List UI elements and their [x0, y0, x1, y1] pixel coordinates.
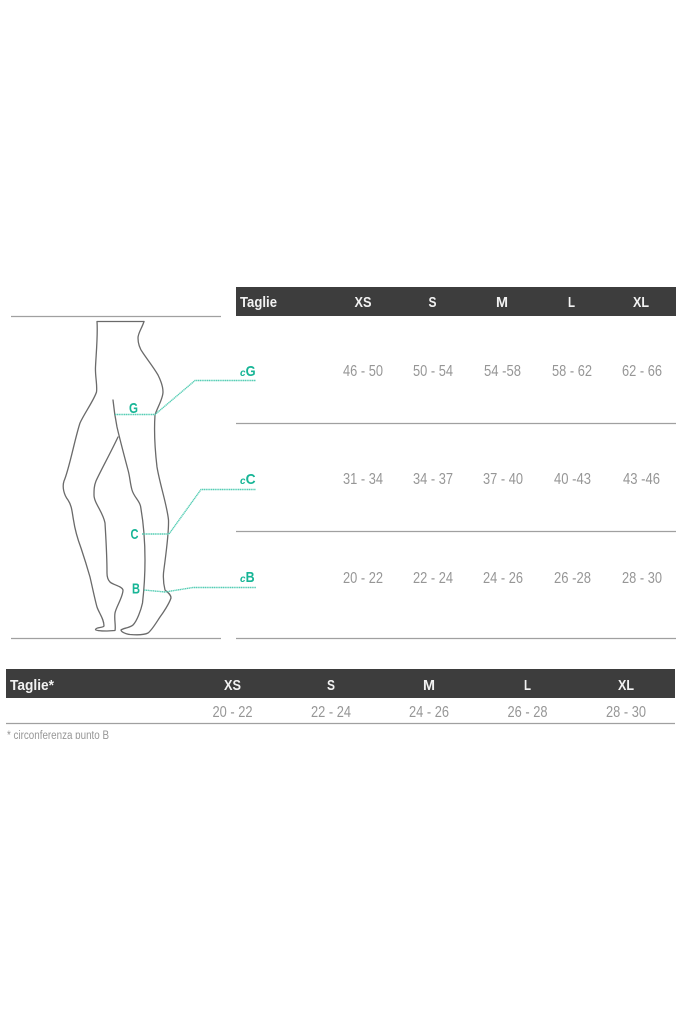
row C values	[343, 471, 660, 488]
header sizes: XL	[618, 677, 634, 694]
footnote: * circonferenza punto B	[7, 730, 109, 742]
panel: leg diagram	[11, 316, 256, 638]
values: 28 - 30	[606, 704, 646, 721]
row G values: 58 - 62	[552, 363, 592, 380]
row label cC: cC	[240, 471, 256, 488]
row C values: 37 - 40	[483, 471, 523, 488]
measure line G	[115, 380, 256, 414]
label C: C	[130, 526, 139, 543]
top rule of diagram	[11, 316, 221, 318]
table bottom rule	[6, 722, 675, 724]
row G values: 50 - 54	[413, 363, 453, 380]
row G values: 62 - 66	[622, 363, 662, 380]
icon: rear leg outline	[63, 322, 144, 631]
header sizes: S	[327, 677, 335, 694]
values: 26 - 28	[508, 704, 548, 721]
header sizes	[354, 294, 649, 311]
header sizes: XL	[633, 294, 649, 311]
panel: secondary size table	[6, 669, 675, 742]
header sizes: XS	[354, 294, 372, 311]
row B values	[343, 570, 662, 587]
label G: G	[129, 400, 138, 417]
row B values: 26 -28	[554, 570, 591, 587]
divider	[236, 422, 676, 424]
row C values: 40 -43	[554, 471, 591, 488]
values: 24 - 26	[409, 704, 449, 721]
table header band	[6, 669, 675, 698]
header sizes	[224, 677, 634, 694]
panel: main size table	[236, 287, 676, 638]
row label cG: cG	[240, 363, 256, 380]
header sizes: M	[496, 294, 508, 311]
row B values: 22 - 24	[413, 570, 453, 587]
values: 22 - 24	[311, 704, 351, 721]
measure line B	[144, 588, 256, 592]
measure line C	[142, 490, 256, 534]
divider	[236, 530, 676, 532]
header sizes: L	[524, 677, 531, 694]
row B values: 24 - 26	[483, 570, 523, 587]
header sizes: L	[568, 294, 575, 311]
header sizes: XS	[224, 677, 241, 694]
row B values: 20 - 22	[343, 570, 383, 587]
header sizes: S	[428, 294, 436, 311]
values	[212, 704, 646, 721]
row C values: 43 -46	[623, 471, 660, 488]
row G values	[343, 363, 662, 380]
icon: front leg outline	[113, 322, 171, 635]
table header band	[236, 287, 676, 316]
table bottom rule	[236, 638, 676, 640]
label B: B	[132, 580, 140, 598]
row label cB: cB	[240, 569, 255, 586]
header: Taglie: Taglie	[240, 294, 277, 311]
row C values: 31 - 34	[343, 471, 383, 488]
row G values: 54 -58	[484, 363, 521, 380]
row G values: 46 - 50	[343, 363, 383, 380]
header sizes: M	[423, 677, 435, 694]
row B values: 28 - 30	[622, 570, 662, 587]
values: 20 - 22	[212, 704, 252, 721]
header: Taglie*: Taglie*	[10, 677, 54, 694]
bottom rule of diagram	[11, 638, 221, 640]
row C values: 34 - 37	[413, 471, 453, 488]
